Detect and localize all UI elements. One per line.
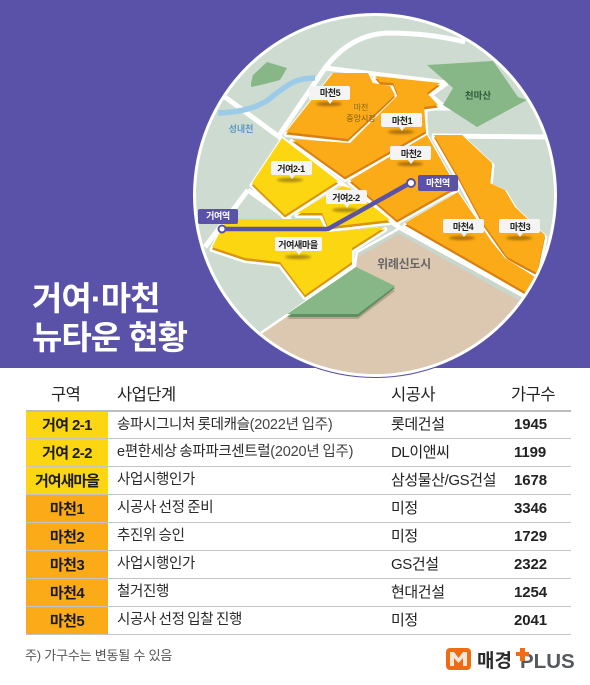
- station label: Macheon: 마천역: [426, 177, 450, 188]
- district: Macheon 4: [405, 192, 535, 293]
- table row: Macheon 1: [26, 495, 571, 523]
- table row: Macheon 4: 1254: [514, 584, 547, 601]
- map tag: Macheon 5: 마천5: [320, 87, 341, 98]
- table row: Macheon 2: 추진위 승인: [117, 528, 185, 544]
- table column headings: 구역: [51, 386, 80, 404]
- table row: Geoyeo Saemaeul: 사업시행인가: [117, 472, 195, 488]
- table row: Geoyeo 2-1: [26, 412, 571, 439]
- table top rule: [26, 410, 571, 412]
- table row: Macheon 3: GS건설: [391, 556, 439, 573]
- table row: Macheon 5: 2041: [514, 612, 547, 629]
- table row: Geoyeo 2-1: 롯데건설: [391, 416, 445, 433]
- table row: Macheon 3: 2322: [514, 556, 547, 573]
- table row: Macheon 4: 마천4: [50, 585, 84, 602]
- table row: Macheon 4: [26, 579, 571, 607]
- map tag: Geoyeo 2-2: [326, 190, 367, 212]
- roads: [205, 33, 545, 298]
- district: Macheon 2: [350, 135, 457, 220]
- title: 뉴타운 현황: [32, 319, 188, 356]
- table row: Geoyeo 2-1: 거여 2-1: [42, 417, 92, 434]
- table row: Geoyeo 2-2: DL이앤씨: [391, 444, 450, 461]
- map place names: 천마산: [465, 90, 491, 102]
- table row: Macheon 5: [26, 607, 571, 635]
- footnote: 주) 가구수는 변동될 수 있음: [25, 648, 172, 663]
- district: Macheon 3: [434, 135, 545, 273]
- map place names: 마천: [354, 102, 368, 112]
- header background panel: [0, 0, 590, 368]
- district: Macheon 5: [286, 73, 395, 139]
- district: Geoyeo 2-2: [297, 186, 390, 227]
- district: Macheon 1: [292, 76, 440, 177]
- table row: Macheon 1: 미정: [391, 500, 418, 517]
- table row: Macheon 2: [26, 523, 571, 551]
- mountain: Cheonmasan: [427, 61, 527, 127]
- table row: Macheon 3: 마천3: [50, 557, 84, 574]
- map tag: Geoyeo 2-2: 거여2-2: [332, 192, 360, 203]
- table row: Macheon 5: 미정: [391, 612, 418, 629]
- park in Wirye: [287, 290, 395, 319]
- map place names: 중앙시장: [346, 113, 376, 123]
- yellow block depth: [212, 140, 390, 298]
- table column headings: 사업단계: [117, 386, 176, 404]
- river: [218, 78, 315, 113]
- table column headings: 시공사: [391, 386, 435, 404]
- map place names: 위례신도시: [377, 256, 431, 271]
- table row: Geoyeo 2-2: 거여 2-2: [42, 445, 92, 462]
- station label: Geoyeo: 거여역: [206, 210, 230, 221]
- map tag: Geoyeo Saemaeul: [275, 237, 322, 259]
- station label: Geoyeo: [198, 209, 238, 224]
- district: Geoyeo Saemaeul: [212, 219, 385, 295]
- table row: Macheon 1: 3346: [514, 500, 547, 517]
- logo: Maekyung Plus: 매경: [477, 650, 512, 672]
- table row: Geoyeo Saemaeul: [26, 467, 571, 495]
- map place names: [229, 90, 491, 271]
- map: circular district map: [32, 13, 557, 378]
- table row: Geoyeo 2-2: 1199: [514, 444, 546, 461]
- table row: Macheon 1: 시공사 선정 준비: [117, 500, 213, 516]
- table row: Macheon 1: 마천1: [50, 501, 84, 518]
- table column headings: 가구수: [511, 386, 555, 404]
- subway line: [218, 179, 415, 232]
- title: 거여·마천: [32, 280, 159, 317]
- table row: Geoyeo Saemaeul: 거여새마을: [35, 473, 99, 490]
- map tag: Macheon 5: [309, 86, 350, 106]
- logo: Maekyung Plus: PLUS: [520, 650, 575, 673]
- map tag: Macheon 2: 마천2: [401, 148, 422, 159]
- table row: Geoyeo Saemaeul: 삼성물산/GS건설: [391, 472, 496, 489]
- table row: Geoyeo 2-1: 1945: [514, 416, 547, 433]
- table column headings: [51, 386, 555, 404]
- map tag: Macheon 1: 마천1: [392, 115, 413, 126]
- map place names: 성내천: [229, 123, 253, 134]
- table row: Macheon 3: 사업시행인가: [117, 556, 195, 572]
- table row: Geoyeo 2-2: [26, 439, 571, 467]
- map tag: Geoyeo Saemaeul: 거여새마을: [278, 239, 318, 250]
- table row: Macheon 5: 마천5: [50, 613, 84, 630]
- map tag: Macheon 4: 마천4: [453, 221, 474, 232]
- map tag: Geoyeo 2-1: 거여2-1: [277, 163, 305, 174]
- table row: Macheon 4: 현대건설: [391, 584, 445, 601]
- map tag: Macheon 2: [390, 146, 431, 166]
- table row: Macheon 2: 마천2: [50, 529, 84, 546]
- table row: Geoyeo 2-2: e편한세상 송파파크센트럴(2020년 입주): [117, 444, 353, 460]
- table row: Geoyeo Saemaeul: 1678: [514, 472, 547, 489]
- table row: Macheon 2: 1729: [514, 528, 547, 545]
- map tag: Macheon 4: [443, 219, 484, 240]
- title: [32, 280, 188, 356]
- map tag: Macheon 1: [381, 113, 422, 134]
- district: Geoyeo 2-1: [252, 138, 338, 215]
- map tag: Macheon 3: 마천3: [510, 221, 531, 232]
- small park: [251, 62, 287, 87]
- orange block depth: [286, 76, 545, 296]
- logo: Maekyung Plus: [446, 648, 575, 673]
- station label: Macheon: [418, 175, 458, 191]
- table row: Macheon 3: [26, 551, 571, 579]
- table row: Macheon 4: 철거진행: [117, 584, 169, 600]
- map tag: Macheon 3: [499, 219, 540, 240]
- table row: Geoyeo 2-1: 송파시그니처 롯데캐슬(2022년 입주): [117, 417, 333, 433]
- table row: Macheon 2: 미정: [391, 528, 418, 545]
- table row: Macheon 5: 시공사 선정 입찰 진행: [117, 612, 242, 628]
- Wirye new town: [260, 228, 522, 374]
- map tag: Geoyeo 2-1: [271, 161, 312, 182]
